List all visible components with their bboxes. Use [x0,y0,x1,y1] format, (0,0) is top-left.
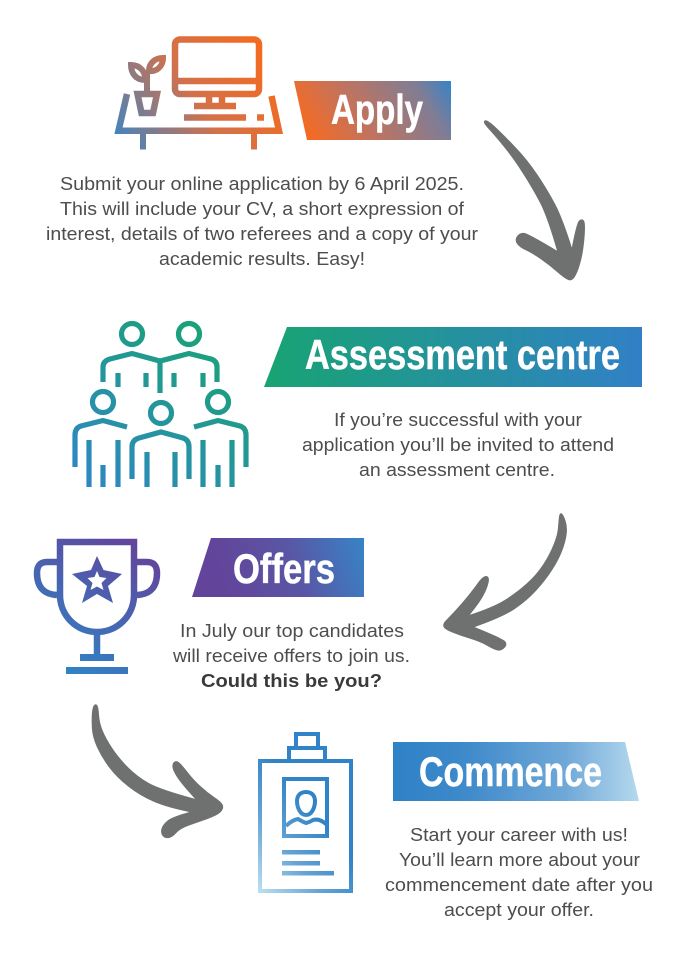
text block: offers description [172,620,410,691]
text block: commence description: accept your offer. [444,899,594,920]
text block: apply description: This will include your CV, a short expression of [60,198,465,219]
text block: offers description: In July our top candidates [180,620,404,641]
text block: apply description [46,173,478,269]
text block: commence description: You’ll learn more about your [399,849,640,870]
panel: commence [260,734,653,920]
text block: assessment description: application you’ll be invited to attend [302,434,614,455]
heading banner: Commence [393,742,639,801]
arrow: apply to assessment centre [484,121,584,280]
text block: apply description: Submit your online application by 6 April 2025. [60,173,464,194]
text block: assessment description: an assessment centre. [359,459,555,480]
text block: commence description: Start your career with us! [410,824,628,845]
text block: assessment description: If you’re successful with your [334,409,582,430]
heading banner: Assessment centre [264,327,642,387]
heading banner: Apply: Apply [331,86,424,133]
heading banner: Assessment centre: Assessment centre [305,331,620,378]
heading banner: Commence: Commence [419,748,602,795]
arrow: offers to commence [92,705,223,838]
icon: group of people [75,324,246,487]
panel: apply [46,40,478,269]
text block: offers description: will receive offers to join us. [172,645,410,666]
heading banner: Offers [192,538,364,597]
panel: assessment centre [75,324,642,487]
icon: id badge [260,734,351,891]
icon: desk with computer and plant [118,40,279,150]
text block: assessment description [302,409,614,480]
text block: commence description: commencement date after you [385,874,653,895]
text block: offers description: Could this be you? [201,670,382,691]
text block: apply description: academic results. Easy! [159,248,365,269]
panel: offers [37,538,410,691]
text block: commence description [385,824,653,920]
heading banner: Apply [294,81,451,140]
arrow: assessment centre to offers [444,514,566,650]
text block: apply description: interest, details of two referees and a copy of your [46,223,478,244]
icon: trophy with star [37,542,157,674]
heading banner: Offers: Offers [233,545,335,592]
